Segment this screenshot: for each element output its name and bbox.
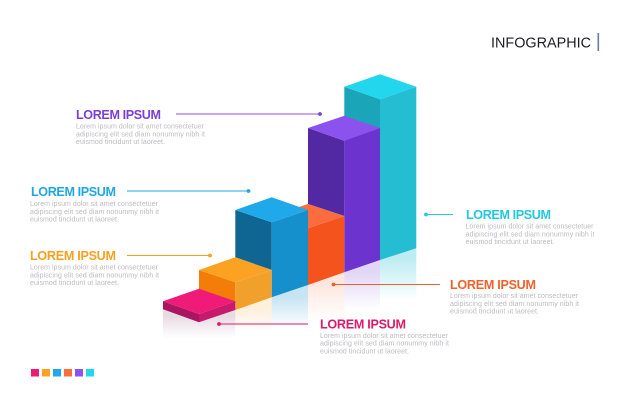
callout: cyan: euismod tincidunt ut laoreet. bbox=[466, 239, 555, 246]
bar: blue bbox=[235, 197, 308, 297]
callout: pink: LOREM IPSUM bbox=[320, 318, 406, 332]
callout: red-orange bbox=[332, 278, 579, 316]
bar: cyan bbox=[344, 74, 416, 260]
colour legend squares bbox=[31, 369, 94, 376]
callout: blue: LOREM IPSUM bbox=[31, 185, 116, 199]
bar: red-orange bbox=[299, 204, 344, 285]
callout: purple: Lorem ipsum dolor sit amet consectetuer bbox=[76, 124, 205, 130]
callout: blue bbox=[30, 185, 250, 224]
floor reflections bbox=[163, 248, 416, 338]
title: INFOGRAPHIC bbox=[491, 36, 591, 52]
callout: pink: euismod tincidunt ut laoreet. bbox=[320, 348, 409, 355]
callout: blue: adipiscing elit sed diam nonummy nibh it bbox=[30, 209, 159, 216]
callout: amber: euismod tincidunt ut laoreet. bbox=[30, 280, 119, 287]
callout: pink: adipiscing elit sed diam nonummy nibh it bbox=[320, 341, 449, 348]
callout: cyan: Lorem ipsum dolor sit amet consectetuer bbox=[466, 224, 594, 230]
callout: purple: LOREM IPSUM bbox=[76, 108, 161, 122]
bar: amber bbox=[199, 257, 272, 310]
bar: pink bbox=[163, 289, 235, 322]
callout: blue: euismod tincidunt ut laoreet. bbox=[30, 216, 119, 224]
bar: purple bbox=[308, 116, 380, 272]
stepped 3D bar chart bbox=[163, 74, 416, 322]
callout: amber: Lorem ipsum dolor sit amet consectetuer bbox=[30, 264, 159, 272]
callout: amber: LOREM IPSUM bbox=[30, 249, 116, 263]
callout: cyan: LOREM IPSUM bbox=[466, 208, 551, 222]
callout: red-orange: Lorem ipsum dolor sit amet consectetuer bbox=[450, 293, 579, 300]
callout: amber bbox=[30, 249, 212, 287]
callout: red-orange: adipiscing elit sed diam nonummy nibh it bbox=[450, 301, 579, 308]
callout: cyan bbox=[424, 208, 595, 246]
callout: purple bbox=[76, 108, 322, 146]
callout: cyan: adipiscing elit sed diam nonummy nibh it bbox=[466, 231, 595, 238]
callout: blue: Lorem ipsum dolor sit amet consectetuer bbox=[30, 201, 159, 208]
callout: pink: Lorem ipsum dolor sit amet consectetuer bbox=[320, 333, 449, 340]
callout: red-orange: euismod tincidunt ut laoreet. bbox=[450, 308, 539, 316]
callout: amber: adipiscing elit sed diam nonummy nibh it bbox=[30, 272, 159, 279]
callout: red-orange: LOREM IPSUM bbox=[450, 278, 536, 292]
callout: purple: adipiscing elit sed diam nonummy nibh it bbox=[76, 131, 205, 138]
callout: purple: euismod tincidunt ut laoreet. bbox=[76, 139, 165, 146]
callout: pink bbox=[217, 318, 449, 355]
